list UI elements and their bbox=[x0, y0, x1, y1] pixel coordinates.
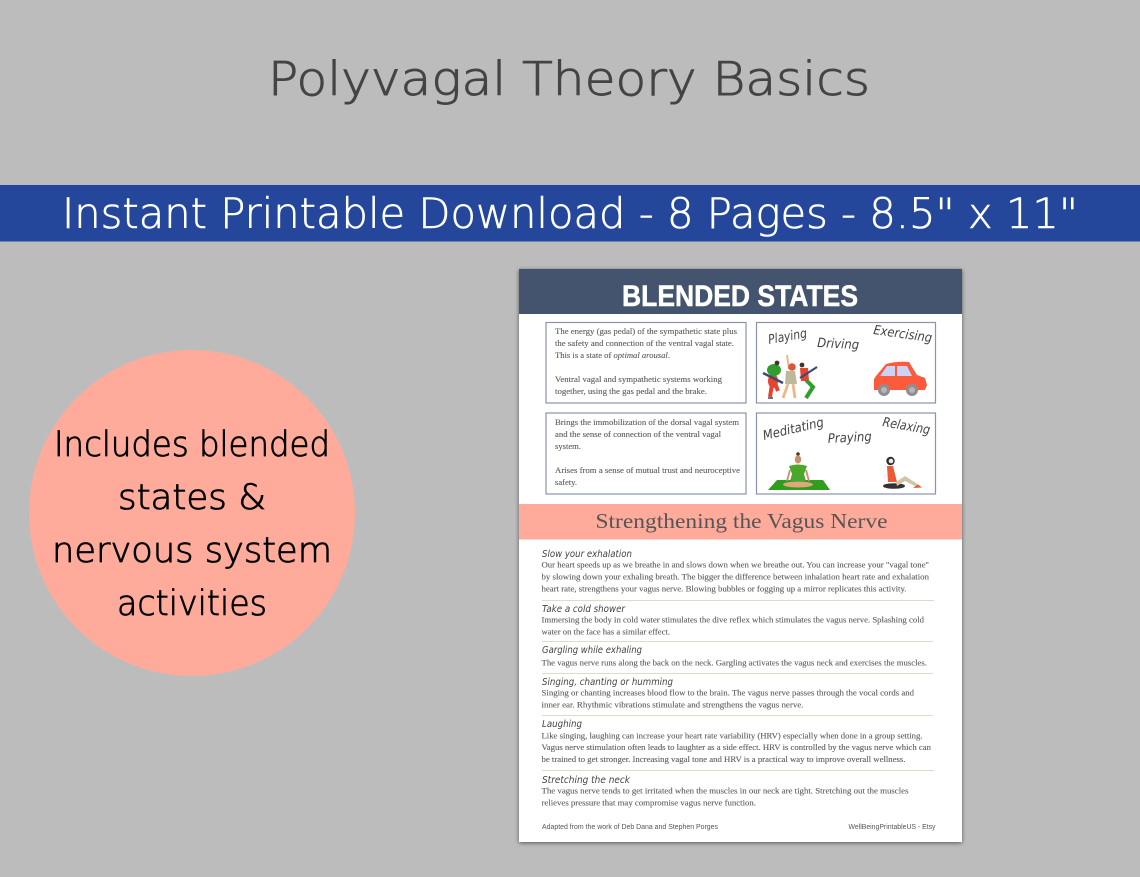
label: Relaxing: Relaxing bbox=[881, 415, 931, 438]
text box: sympathetic blend: The energy (gas pedal) of the sympathetic state plus bbox=[555, 327, 737, 336]
tip: stretching the neck: relieves pressure that may compromise vagus nerve function. bbox=[542, 798, 756, 808]
tip: stretching the neck bbox=[542, 775, 908, 808]
tip: slow your exhalation: heart rate, strengthens your vagus nerve. Blowing bubbles or fogging up a mirror replicates this activity. bbox=[542, 584, 906, 594]
label: Meditating: Meditating bbox=[762, 415, 825, 444]
tip: slow your exhalation: Our heart speeds up as we breathe in and slows down when we breathe out. You can increase your "vagal tone" bbox=[542, 560, 929, 570]
text box: sympathetic blend: This is a state of optimal arousal . bbox=[555, 351, 670, 360]
panel: printable page preview bbox=[519, 269, 962, 842]
tip: laughing: be trained to get stronger. Increasing vagal tone and HRV is a practical way to improve overall wellness. bbox=[542, 755, 906, 764]
tip: slow your exhalation: by slowing down your exhaling breath. The bigger the difference between inhalation heart rate and exhalation bbox=[542, 572, 929, 582]
text box: dorsal blend: Brings the immobilization of the dorsal vagal system bbox=[555, 418, 740, 427]
tip: gargling bbox=[542, 645, 927, 668]
section band heading bbox=[519, 504, 962, 540]
tip: cold shower: Immersing the body in cold water stimulates the dive reflex which stimulates the vagus nerve. Splashing cold bbox=[542, 616, 924, 624]
text box: dorsal blend: Arises from a sense of mutual trust and neuroceptive bbox=[555, 466, 740, 475]
tip: cold shower bbox=[542, 604, 924, 636]
text box: dorsal blend: and the sense of connection of the ventral vagal bbox=[555, 430, 722, 439]
callout circle: Includes blended bbox=[54, 425, 330, 465]
banner: Instant Printable Download - 8 Pages - 8.5" x 11" bbox=[62, 189, 1078, 238]
tip: laughing: Like singing, laughing can increase your heart rate variability (HRV) especially when done in a group setting. bbox=[542, 732, 922, 740]
icon: dancing people bbox=[763, 355, 817, 398]
icon: meditating person bbox=[768, 452, 830, 490]
label: Exercising: Exercising bbox=[872, 323, 933, 346]
image box: active states bbox=[756, 322, 936, 403]
tip: singing bbox=[542, 677, 914, 710]
tip: cold shower: water on the face has a similar effect. bbox=[542, 628, 670, 636]
footer credits: Adapted from the work of Deb Dana and Stephen Porges bbox=[542, 824, 718, 831]
tip: singing: Singing, chanting or humming bbox=[542, 677, 673, 688]
text box: sympathetic blend: the safety and connection of the ventral vagal state. bbox=[555, 339, 734, 348]
text box: sympathetic blend: Ventral vagal and sympathetic systems working bbox=[555, 375, 722, 384]
callout circle bbox=[29, 350, 355, 676]
label: Playing: Playing bbox=[767, 326, 808, 348]
text box: sympathetic blend: together, using the gas pedal and the brake. bbox=[555, 387, 707, 396]
tip: singing: inner ear. Rhythmic vibrations stimulate and strengthens the vagus nerve. bbox=[542, 700, 804, 710]
text box: sympathetic blend bbox=[546, 322, 746, 403]
footer credits: WellBeingPrintableUS - Etsy bbox=[848, 824, 936, 831]
callout circle: nervous system bbox=[52, 531, 332, 571]
tip: singing: Singing or chanting increases blood flow to the brain. The vagus nerve passes through the vocal cords and bbox=[542, 688, 914, 698]
tip: laughing: Laughing bbox=[542, 719, 582, 730]
label: Driving: Driving bbox=[817, 336, 860, 353]
tip: stretching the neck: The vagus nerve tends to get irritated when the muscles in our neck are tight. Stretching out the muscles bbox=[542, 786, 908, 796]
page header bbox=[519, 269, 962, 314]
image box: calm states bbox=[756, 413, 936, 494]
page header: BLENDED STATES bbox=[622, 280, 858, 313]
icon: red car bbox=[874, 362, 927, 396]
tip: cold shower: Take a cold shower bbox=[542, 604, 626, 615]
callout circle: states & bbox=[118, 478, 266, 518]
tip: slow your exhalation bbox=[542, 549, 929, 594]
tip: laughing bbox=[542, 719, 931, 764]
icon: relaxing person bbox=[883, 457, 922, 489]
footer credits bbox=[542, 824, 936, 831]
text box: dorsal blend: safety. bbox=[555, 478, 577, 487]
tip: stretching the neck: Stretching the neck bbox=[542, 775, 631, 786]
section band heading: Strengthening the Vagus Nerve bbox=[596, 509, 888, 533]
tip: gargling: The vagus nerve runs along the back on the neck. Gargling activates the vagus neck and exercises the muscles. bbox=[542, 658, 927, 668]
text box: dorsal blend bbox=[546, 413, 746, 494]
tip: gargling: Gargling while exhaling bbox=[542, 645, 642, 656]
text box: dorsal blend: system. bbox=[555, 442, 581, 451]
title: Polyvagal Theory Basics bbox=[268, 52, 870, 106]
label: Praying: Praying bbox=[827, 430, 872, 447]
tip: laughing: Vagus nerve stimulation often leads to laughter as a side effect. HRV is controlled by the vagus nerve which can bbox=[542, 743, 931, 752]
callout circle: activities bbox=[117, 584, 267, 624]
tip: slow your exhalation: Slow your exhalation bbox=[542, 549, 632, 560]
